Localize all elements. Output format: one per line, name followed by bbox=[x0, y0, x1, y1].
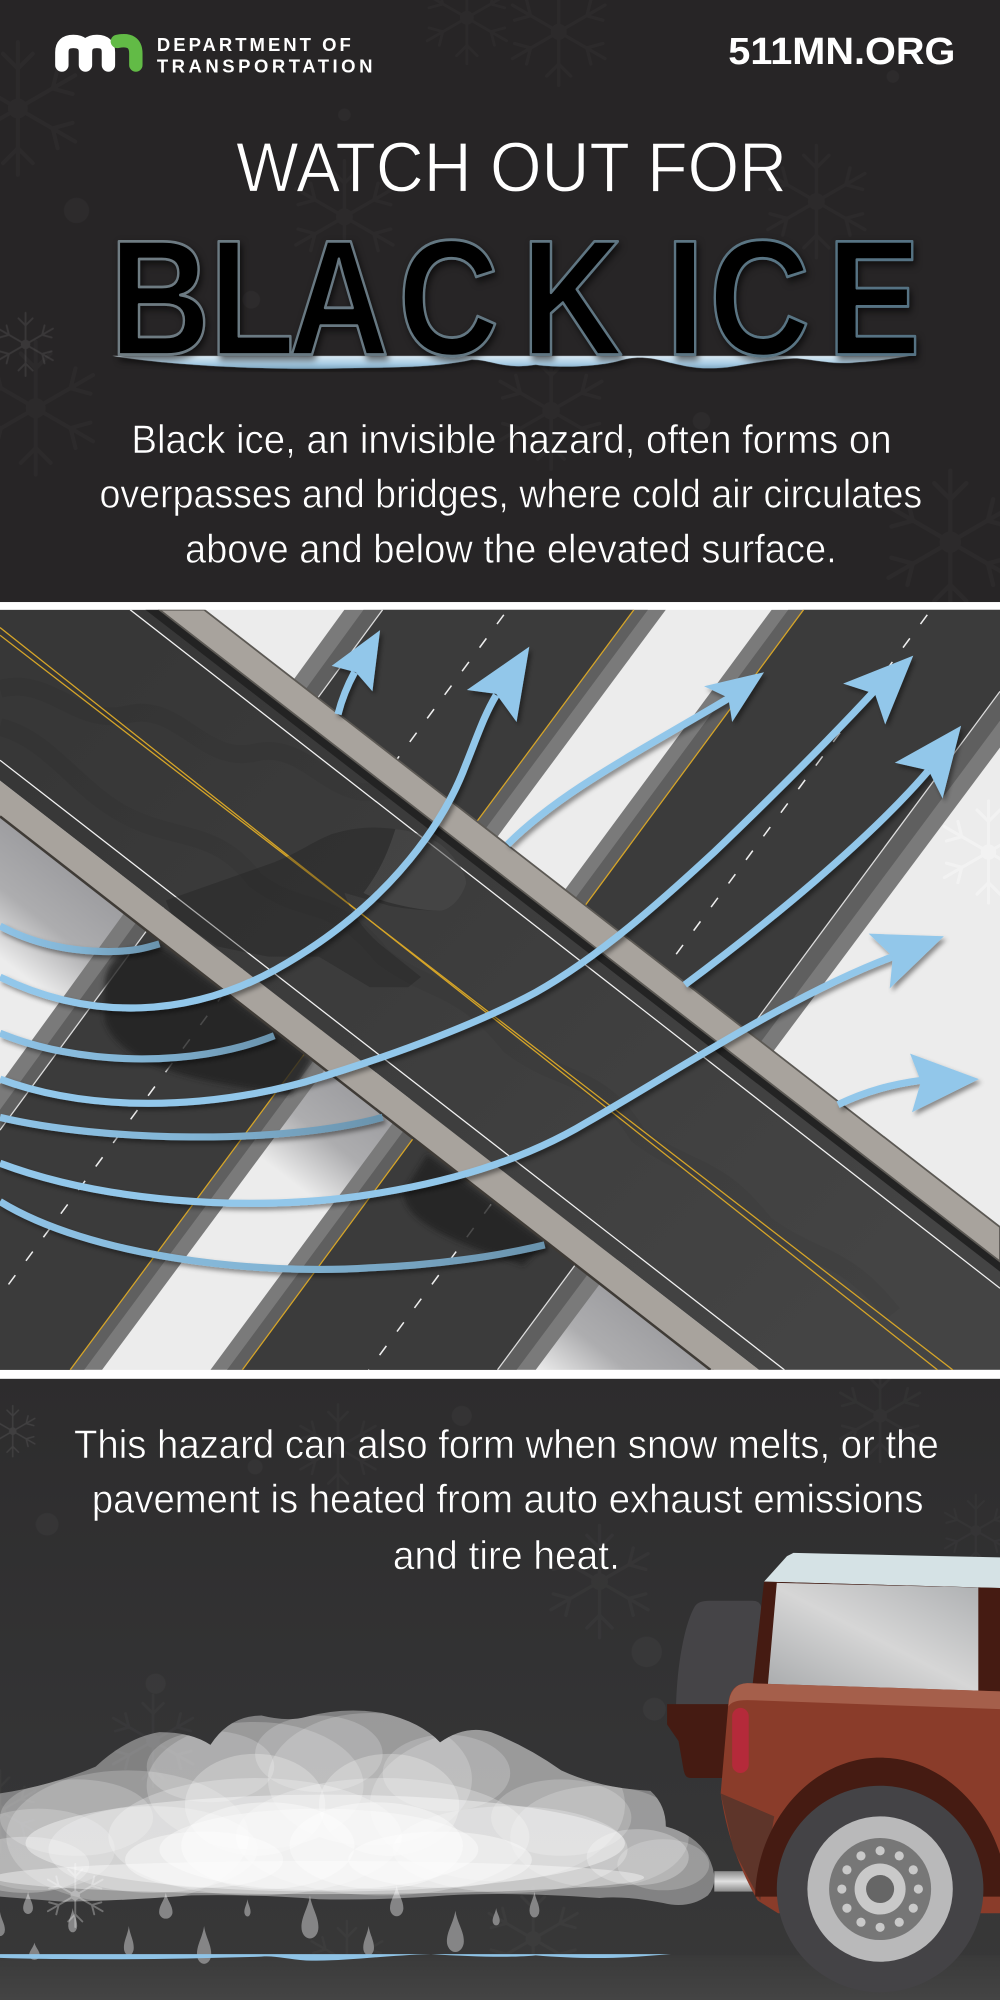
intro paragraph: Black ice, an invisible hazard, often forms on bbox=[131, 418, 892, 462]
arrow: short flow at right edge bbox=[838, 1054, 979, 1112]
panel: overpass illustration bbox=[0, 610, 1000, 1370]
website link: 511MN.ORG bbox=[728, 30, 955, 73]
thin ice film on road bbox=[0, 1954, 671, 1961]
arrow: small upward flow bbox=[332, 630, 380, 714]
bright snowflake on cloud bbox=[48, 1864, 103, 1927]
arrow: flow rising from top barrier bbox=[508, 672, 764, 844]
spare tire bbox=[676, 1601, 761, 1705]
truck body bbox=[721, 1683, 1000, 1913]
taillight bbox=[732, 1708, 749, 1773]
black ice lettering: BLACK ICE bbox=[110, 207, 921, 390]
intro paragraph: above and below the elevated surface. bbox=[185, 527, 837, 571]
overpass barriers bbox=[0, 610, 1000, 1370]
deck pavement waves bbox=[0, 687, 1000, 1314]
logo: Minnesota mn mark bbox=[62, 41, 136, 65]
air flow passing below deck bbox=[0, 926, 545, 1269]
dark skid patch on deck bbox=[166, 828, 466, 987]
background: top dark panel bbox=[0, 0, 1000, 607]
rear bumper bbox=[667, 1704, 733, 1778]
lower paragraph: pavement is heated from auto exhaust emissions bbox=[92, 1478, 923, 1522]
road under overpass: right bbox=[210, 610, 1000, 1370]
road under overpass: left bbox=[0, 610, 666, 1370]
water drops from melting snow bbox=[0, 1885, 539, 1964]
snowy ground bbox=[206, 610, 1000, 1226]
wheel arch bbox=[755, 1758, 1000, 1897]
lower paragraph: This hazard can also form when snow melts, or the bbox=[74, 1423, 939, 1467]
lower paragraph bbox=[74, 1423, 939, 1578]
heading: watch out for: WATCH OUT FOR bbox=[236, 127, 787, 206]
body highlight bbox=[728, 1683, 1000, 1709]
arrow: curve over deck to top centre bbox=[0, 647, 529, 1008]
exhaust pipe bbox=[714, 1871, 778, 1892]
arrow: long flow to upper right bbox=[0, 656, 913, 1103]
arrow: long low flow to right bbox=[0, 934, 944, 1203]
white frame around overpass illustration bbox=[0, 602, 1000, 1379]
intro paragraph: overpasses and bridges, where cold air circulates bbox=[99, 473, 922, 517]
lighter patch on deck bbox=[364, 829, 466, 911]
intro paragraph bbox=[99, 418, 922, 572]
lower paragraph: and tire heat. bbox=[393, 1534, 620, 1578]
road surface bbox=[0, 1955, 1000, 2000]
roof bbox=[764, 1553, 1000, 1588]
lower body shade bbox=[721, 1793, 774, 1901]
overpass shadow on ground bbox=[0, 804, 714, 1370]
heading: black ice with ice layer bbox=[110, 207, 921, 390]
rear window bbox=[768, 1583, 978, 1691]
dark ice patches on lower roads bbox=[105, 947, 546, 1265]
ice shelf under lettering bbox=[112, 356, 911, 369]
logo text: Department of Transportation: TRANSPORTATION bbox=[157, 56, 372, 77]
logo text: Department of Transportation bbox=[157, 34, 372, 77]
window frame bbox=[753, 1582, 1000, 1696]
background: bottom dark panel bbox=[0, 1375, 1000, 2000]
logo text: Department of Transportation: DEPARTMENT OF bbox=[157, 34, 351, 55]
exhaust cloud bbox=[0, 1710, 714, 1905]
faint snowflake on ground bbox=[944, 801, 1000, 903]
truck bbox=[667, 1553, 1000, 1992]
overpass deck bbox=[0, 610, 1000, 1370]
deck lane markings bbox=[0, 610, 1000, 1370]
arrow: flow emerging from barrier to right bbox=[685, 726, 961, 985]
dark shoulder strip beside upper barrier bbox=[145, 610, 1000, 1272]
wheel bbox=[777, 1786, 983, 1992]
